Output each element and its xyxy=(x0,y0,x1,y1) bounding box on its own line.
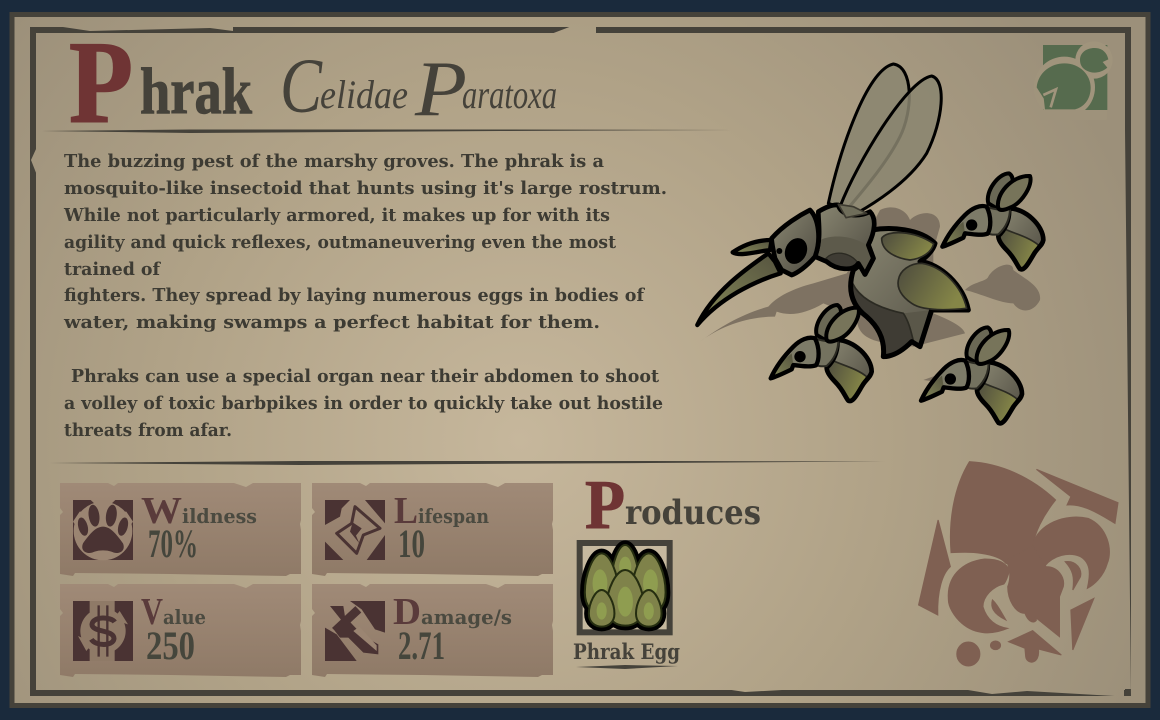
stat: value: alue xyxy=(163,605,206,629)
scientific name: aratoxa xyxy=(462,72,557,117)
value: 10 xyxy=(398,521,425,566)
produces heading: roduces xyxy=(625,493,761,533)
main wings xyxy=(828,64,941,213)
scientific name xyxy=(280,42,557,132)
description text: trained of xyxy=(64,259,161,280)
stat: lifespan xyxy=(312,483,553,576)
value: 250 xyxy=(146,623,195,668)
illustration: phrak swarm xyxy=(697,64,1043,423)
description text: water, making swamps a perfect habitat for them. xyxy=(63,312,600,333)
label: L xyxy=(394,490,418,532)
description text: Phraks can use a special organ near their abdomen to shoot xyxy=(71,366,660,387)
small phrak bottom left xyxy=(771,305,872,401)
stat: damage: amage/s xyxy=(421,605,512,629)
item underline xyxy=(576,665,678,669)
label: D xyxy=(393,591,421,633)
description text: The buzzing pest of the marshy groves. The phrak is a xyxy=(64,151,604,172)
description text: While not particularly armored, it makes up for with its xyxy=(63,205,610,226)
panel xyxy=(60,584,301,677)
stat: damage xyxy=(312,584,553,677)
main insect body xyxy=(697,204,968,357)
head xyxy=(772,210,819,275)
icon: hourglass xyxy=(325,500,385,560)
wing stem xyxy=(838,204,867,218)
icon: coin xyxy=(73,601,133,661)
section rule xyxy=(50,461,885,465)
title: hrak xyxy=(140,55,252,128)
description text: agility and quick reflexes, outmaneuvering even the most xyxy=(64,232,617,253)
scientific name: C xyxy=(280,42,323,129)
stat: lifespan: ifespan xyxy=(418,504,489,528)
description text: fighters. They spread by laying numerous eggs in bodies of xyxy=(64,285,645,306)
logo xyxy=(1034,41,1113,120)
value: 70% xyxy=(148,521,198,566)
small phrak top right xyxy=(942,173,1043,269)
stat: value xyxy=(60,584,301,677)
produces heading: P xyxy=(585,467,625,544)
rostrum xyxy=(697,253,781,325)
header rule xyxy=(42,130,733,133)
label: V xyxy=(141,591,163,633)
panel xyxy=(312,584,553,677)
description text xyxy=(63,151,667,441)
description text: threats from afar. xyxy=(64,420,232,441)
title: P xyxy=(69,17,133,148)
small phrak bottom right xyxy=(921,327,1022,423)
item name: Phrak Egg xyxy=(573,639,680,664)
thorax xyxy=(815,205,874,274)
scientific name: elidae xyxy=(320,72,408,117)
abdomen xyxy=(851,229,968,357)
icon: paw xyxy=(73,500,133,560)
produces heading xyxy=(585,467,761,544)
upper beak xyxy=(733,240,772,254)
watermark: fleur-de-lis xyxy=(919,462,1118,666)
panel xyxy=(60,483,301,576)
stat: wildness: ildness xyxy=(182,504,257,528)
olive armor plates xyxy=(882,233,967,310)
stat: wildness xyxy=(60,483,301,576)
icon: sword xyxy=(325,601,385,661)
label: W xyxy=(141,490,182,532)
lower abdomen xyxy=(903,310,932,347)
description text: mosquito-like insectoid that hunts using it's large rostrum. xyxy=(64,178,667,199)
item: phrak egg xyxy=(573,543,680,669)
panel xyxy=(312,483,553,576)
egg icon xyxy=(580,543,670,632)
title xyxy=(69,17,252,148)
description text: a volley of toxic barbpikes in order to quickly take out hostile xyxy=(64,393,663,414)
shadows xyxy=(700,207,1040,383)
scientific name: P xyxy=(414,45,467,132)
value: 2.71 xyxy=(398,623,445,668)
